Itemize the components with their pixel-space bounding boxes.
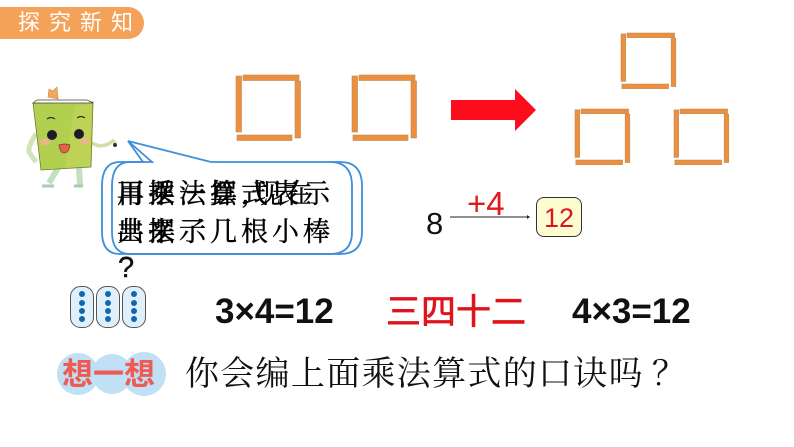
red rhyme: 三四十二: 三四十二 xyxy=(386,293,526,332)
bubble text, line 1 overlay: 用乘法算式表示 xyxy=(117,172,334,211)
label: +4: +4 xyxy=(467,185,505,222)
square four left xyxy=(575,109,630,165)
bubble question mark: ? xyxy=(118,252,134,284)
arrow: thin line with +4 xyxy=(450,215,530,219)
square five right xyxy=(674,109,729,165)
bubble text, line 2 overlay: 出来示 xyxy=(117,210,210,249)
question text: 你会编上面乘法算式的口诀吗？ xyxy=(185,346,687,395)
answer box 12: 12 xyxy=(544,203,574,233)
arrow: red block arrow xyxy=(451,89,536,131)
header tab: 探究新知: 探究新知 xyxy=(18,10,142,35)
header tab: 探究新知 xyxy=(0,7,144,39)
number 8: 8 xyxy=(426,206,443,241)
icon: book mascot xyxy=(26,86,118,188)
think badge: 想一想 xyxy=(57,352,166,396)
icon: dot cards xyxy=(70,286,146,328)
bubble text, line 1 overlapping: 再摆一摆,现在 xyxy=(117,172,316,211)
equation 3×4=12: 3×4=12 xyxy=(215,292,334,331)
square three top xyxy=(621,33,676,89)
answer box 12 xyxy=(536,197,582,237)
think badge: 想一想: 想一想 xyxy=(62,357,155,392)
speech bubble xyxy=(101,140,363,255)
bubble text, line 2 overlapping: 共摆了几根小棒 xyxy=(117,210,334,249)
square one xyxy=(236,75,300,140)
matchstick squares xyxy=(236,32,730,165)
equation 4×3=12: 4×3=12 xyxy=(572,292,691,331)
square two xyxy=(352,75,416,140)
